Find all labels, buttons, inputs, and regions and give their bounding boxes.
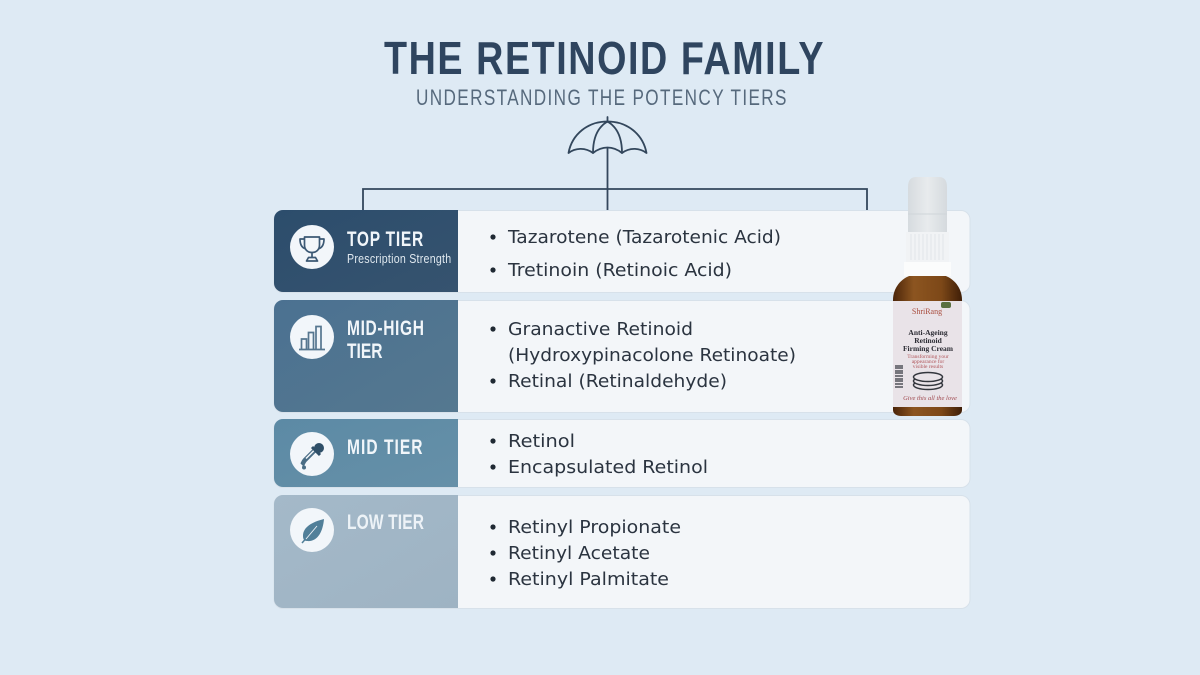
list: mid-high tier xyxy=(490,319,796,392)
list: mid-high tier: (Hydroxypinacolone Retinoate) xyxy=(508,345,796,366)
subtitle: UNDERSTANDING THE POTENCY TIERS xyxy=(416,86,786,111)
panel: mid-high tier xyxy=(274,300,970,412)
list: mid tier: Encapsulated Retinol xyxy=(508,457,708,478)
product label text: ShriRang xyxy=(912,307,942,316)
icon: umbrella xyxy=(568,117,646,153)
product label text xyxy=(903,307,957,402)
panel: mid tier xyxy=(274,419,970,488)
icon: product stack xyxy=(914,372,942,390)
list: low tier: Retinyl Palmitate xyxy=(508,569,669,590)
list: top tier: Tazarotene (Tazarotenic Acid) xyxy=(507,227,781,248)
list: mid-high tier: Retinal (Retinaldehyde) xyxy=(508,371,727,392)
list: mid tier: Retinol xyxy=(508,431,575,452)
product label text: appearance for xyxy=(912,358,944,365)
label: mid-high tier: MID-HIGH xyxy=(347,316,424,340)
product label text: Give this all the love xyxy=(903,395,957,402)
list: top tier: Tretinoin (Retinoic Acid) xyxy=(507,260,732,281)
icon: leaf xyxy=(290,508,334,552)
title: THE RETINOID FAMILY xyxy=(384,32,824,84)
product label text: Transforming your xyxy=(907,353,949,360)
label: prescription strength: Prescription Strength xyxy=(347,251,451,266)
barcode xyxy=(895,366,903,387)
panel: low tier xyxy=(274,495,970,608)
list: top tier xyxy=(490,227,781,281)
icon: bar chart xyxy=(290,315,334,359)
connector tree xyxy=(363,147,867,210)
list: mid tier xyxy=(490,431,708,478)
icon: trophy xyxy=(290,225,334,269)
label: mid-high tier xyxy=(347,316,424,363)
product label text: Retinoid xyxy=(914,336,943,345)
list: low tier xyxy=(490,517,681,590)
list: low tier: Retinyl Acetate xyxy=(508,543,650,564)
leaf logo xyxy=(941,302,951,308)
panel: top tier xyxy=(274,210,970,292)
product label text: Firming Cream xyxy=(903,344,954,353)
label: mid-high tier: TIER xyxy=(347,339,383,363)
icon: dropper xyxy=(290,432,334,476)
product label text: Anti-Ageing xyxy=(908,328,948,337)
label: mid tier: MID TIER xyxy=(347,435,422,459)
label: low tier: LOW TIER xyxy=(347,510,424,534)
product bottle xyxy=(893,177,962,416)
label: top tier: TOP TIER xyxy=(347,227,423,251)
product label text: visible results xyxy=(913,364,943,370)
list: low tier: Retinyl Propionate xyxy=(508,517,681,538)
list: mid-high tier: Granactive Retinoid xyxy=(508,319,693,340)
